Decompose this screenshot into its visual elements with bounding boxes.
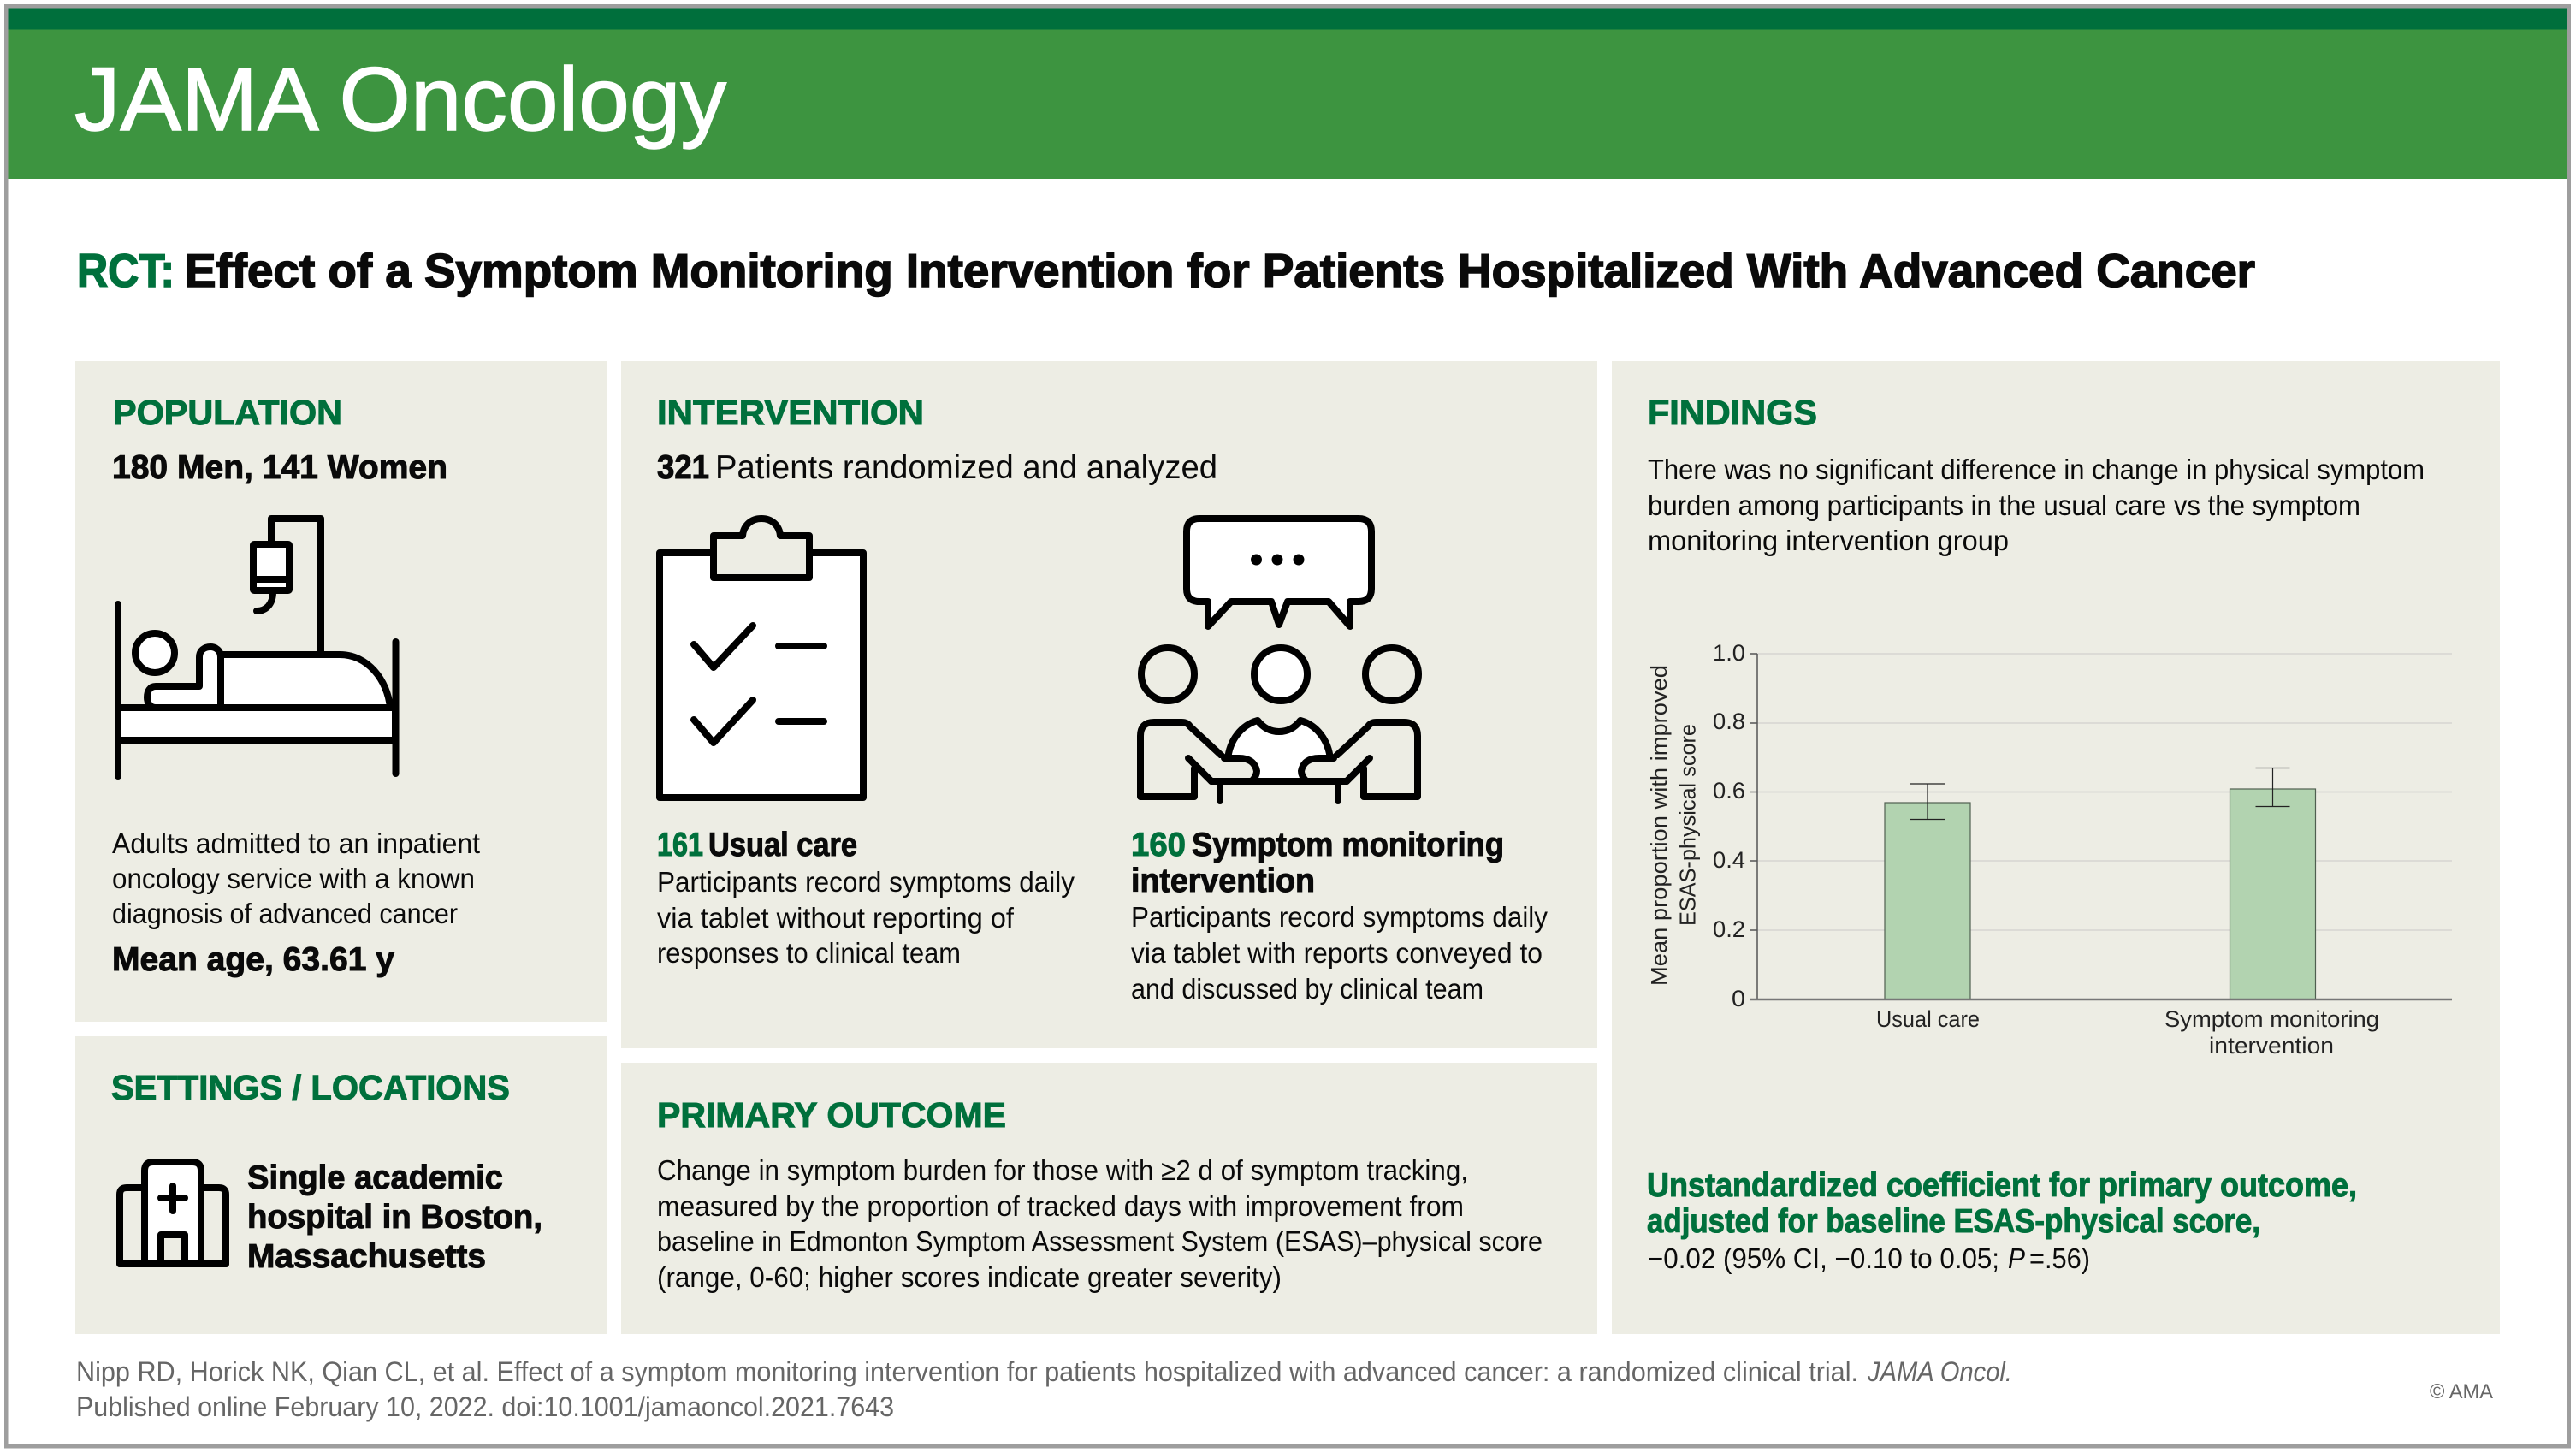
y-axis title: ESAS-physical score bbox=[1675, 724, 1701, 926]
panel: settings and locations bbox=[75, 1036, 607, 1334]
y-axis: 0.4 bbox=[1713, 847, 1745, 873]
copyright: © AMA bbox=[2430, 1380, 2493, 1403]
primary outcome result: =.56) bbox=[2029, 1242, 2090, 1274]
y-axis bbox=[1713, 640, 1757, 1011]
primary outcome description: (range, 0-60; higher scores indicate greater severity) bbox=[657, 1261, 1282, 1293]
symptom monitoring arm: Participants record symptoms daily bbox=[1131, 901, 1548, 933]
symptom monitoring arm: 160 bbox=[1131, 827, 1186, 863]
symptom monitoring arm: and discussed by clinical team bbox=[1131, 973, 1483, 1005]
panel: findings bbox=[1612, 361, 2500, 1334]
findings summary: There was no significant difference in change in physical symptom bbox=[1648, 454, 2425, 485]
x-axis labels: Usual care bbox=[1876, 1006, 1980, 1032]
main title: Effect of a Symptom Monitoring Intervention for Patients Hospitalized With Advanced Cancer bbox=[185, 244, 2255, 297]
population heading: POPULATION bbox=[113, 393, 342, 432]
primary outcome heading: PRIMARY OUTCOME bbox=[657, 1095, 1006, 1135]
usual care arm: Usual care bbox=[708, 827, 857, 863]
population description: diagnosis of advanced cancer bbox=[112, 898, 458, 929]
symptom monitoring arm: Symptom monitoring bbox=[1192, 827, 1504, 863]
primary outcome result: P bbox=[2008, 1242, 2025, 1274]
citation: JAMA Oncol. bbox=[1867, 1356, 2012, 1387]
header band bbox=[9, 9, 2567, 179]
x-axis labels: intervention bbox=[2209, 1033, 2334, 1059]
primary outcome description bbox=[657, 1154, 1543, 1293]
citation bbox=[76, 1356, 2012, 1422]
settings heading: SETTINGS / LOCATIONS bbox=[111, 1068, 510, 1107]
settings description: hospital in Boston, bbox=[247, 1199, 542, 1236]
panel: population bbox=[75, 361, 607, 1022]
intervention heading: INTERVENTION bbox=[657, 393, 924, 432]
settings description bbox=[247, 1159, 542, 1275]
y-axis: 0.8 bbox=[1713, 709, 1745, 734]
bar chart bbox=[1646, 640, 2452, 1059]
citation: Published online February 10, 2022. doi:10.1001/jamaoncol.2021.7643 bbox=[76, 1391, 894, 1422]
findings summary: burden among participants in the usual care vs the symptom bbox=[1648, 489, 2360, 521]
journal title: JAMA Oncology bbox=[74, 50, 727, 150]
usual care arm: responses to clinical team bbox=[657, 937, 961, 969]
y-axis: 0.6 bbox=[1713, 778, 1745, 804]
primary outcome result: −0.02 (95% CI, −0.10 to 0.05; bbox=[1648, 1242, 1999, 1274]
main title: RCT: bbox=[77, 244, 175, 297]
settings description: Massachusetts bbox=[247, 1238, 486, 1275]
population counts: 180 Men, 141 Women bbox=[112, 449, 447, 486]
primary outcome description: measured by the proportion of tracked days with improvement from bbox=[657, 1190, 1464, 1222]
panel: intervention bbox=[621, 361, 1597, 1048]
patients randomized: 321 bbox=[657, 449, 709, 486]
icon: clipboard checklist bbox=[660, 519, 863, 798]
findings summary bbox=[1648, 454, 2425, 556]
symptom monitoring arm: intervention bbox=[1131, 863, 1315, 899]
symptom monitoring arm bbox=[1131, 827, 1548, 1005]
x-axis labels bbox=[1876, 1006, 2379, 1059]
primary outcome result: Unstandardized coefficient for primary outcome, bbox=[1647, 1167, 2357, 1204]
icon: hospital building bbox=[120, 1162, 226, 1264]
usual care arm: via tablet without reporting of bbox=[657, 902, 1015, 934]
primary outcome result bbox=[1647, 1167, 2357, 1274]
primary outcome description: Change in symptom burden for those with ≥2 d of symptom tracking, bbox=[657, 1154, 1468, 1186]
findings summary: monitoring intervention group bbox=[1648, 525, 2009, 556]
population description bbox=[112, 827, 480, 929]
bar: usual care bbox=[1885, 784, 1970, 999]
mean age: Mean age, 63.61 y bbox=[112, 941, 394, 978]
usual care arm bbox=[657, 827, 1075, 969]
findings heading: FINDINGS bbox=[1648, 393, 1817, 432]
y-axis: 1.0 bbox=[1713, 640, 1745, 666]
x-axis labels: Symptom monitoring bbox=[2164, 1006, 2379, 1032]
symptom monitoring arm: via tablet with reports conveyed to bbox=[1131, 937, 1543, 969]
population description: oncology service with a known bbox=[112, 863, 475, 894]
settings description: Single academic bbox=[247, 1159, 503, 1196]
primary outcome result: adjusted for baseline ESAS-physical score, bbox=[1647, 1203, 2260, 1240]
panel: primary outcome bbox=[621, 1063, 1597, 1334]
icon: group discussion with speech bubble bbox=[1140, 519, 1418, 800]
population description: Adults admitted to an inpatient bbox=[112, 827, 480, 859]
y-axis title: Mean proportion with improved bbox=[1646, 665, 1672, 986]
icon: patient in hospital bed with IV bbox=[118, 519, 395, 776]
citation: Nipp RD, Horick NK, Qian CL, et al. Effect of a symptom monitoring intervention for patients hospitalized with advanced cancer: a randomized clinical trial. bbox=[76, 1356, 1858, 1387]
y-axis title bbox=[1646, 665, 1701, 986]
primary outcome description: baseline in Edmonton Symptom Assessment System (ESAS)–physical score bbox=[657, 1225, 1543, 1257]
bar: symptom monitoring bbox=[2230, 768, 2315, 999]
usual care arm: 161 bbox=[657, 827, 703, 863]
usual care arm: Participants record symptoms daily bbox=[657, 866, 1075, 898]
y-axis: 0.2 bbox=[1713, 916, 1745, 942]
y-axis: 0 bbox=[1732, 986, 1745, 1011]
patients randomized: Patients randomized and analyzed bbox=[715, 449, 1217, 486]
